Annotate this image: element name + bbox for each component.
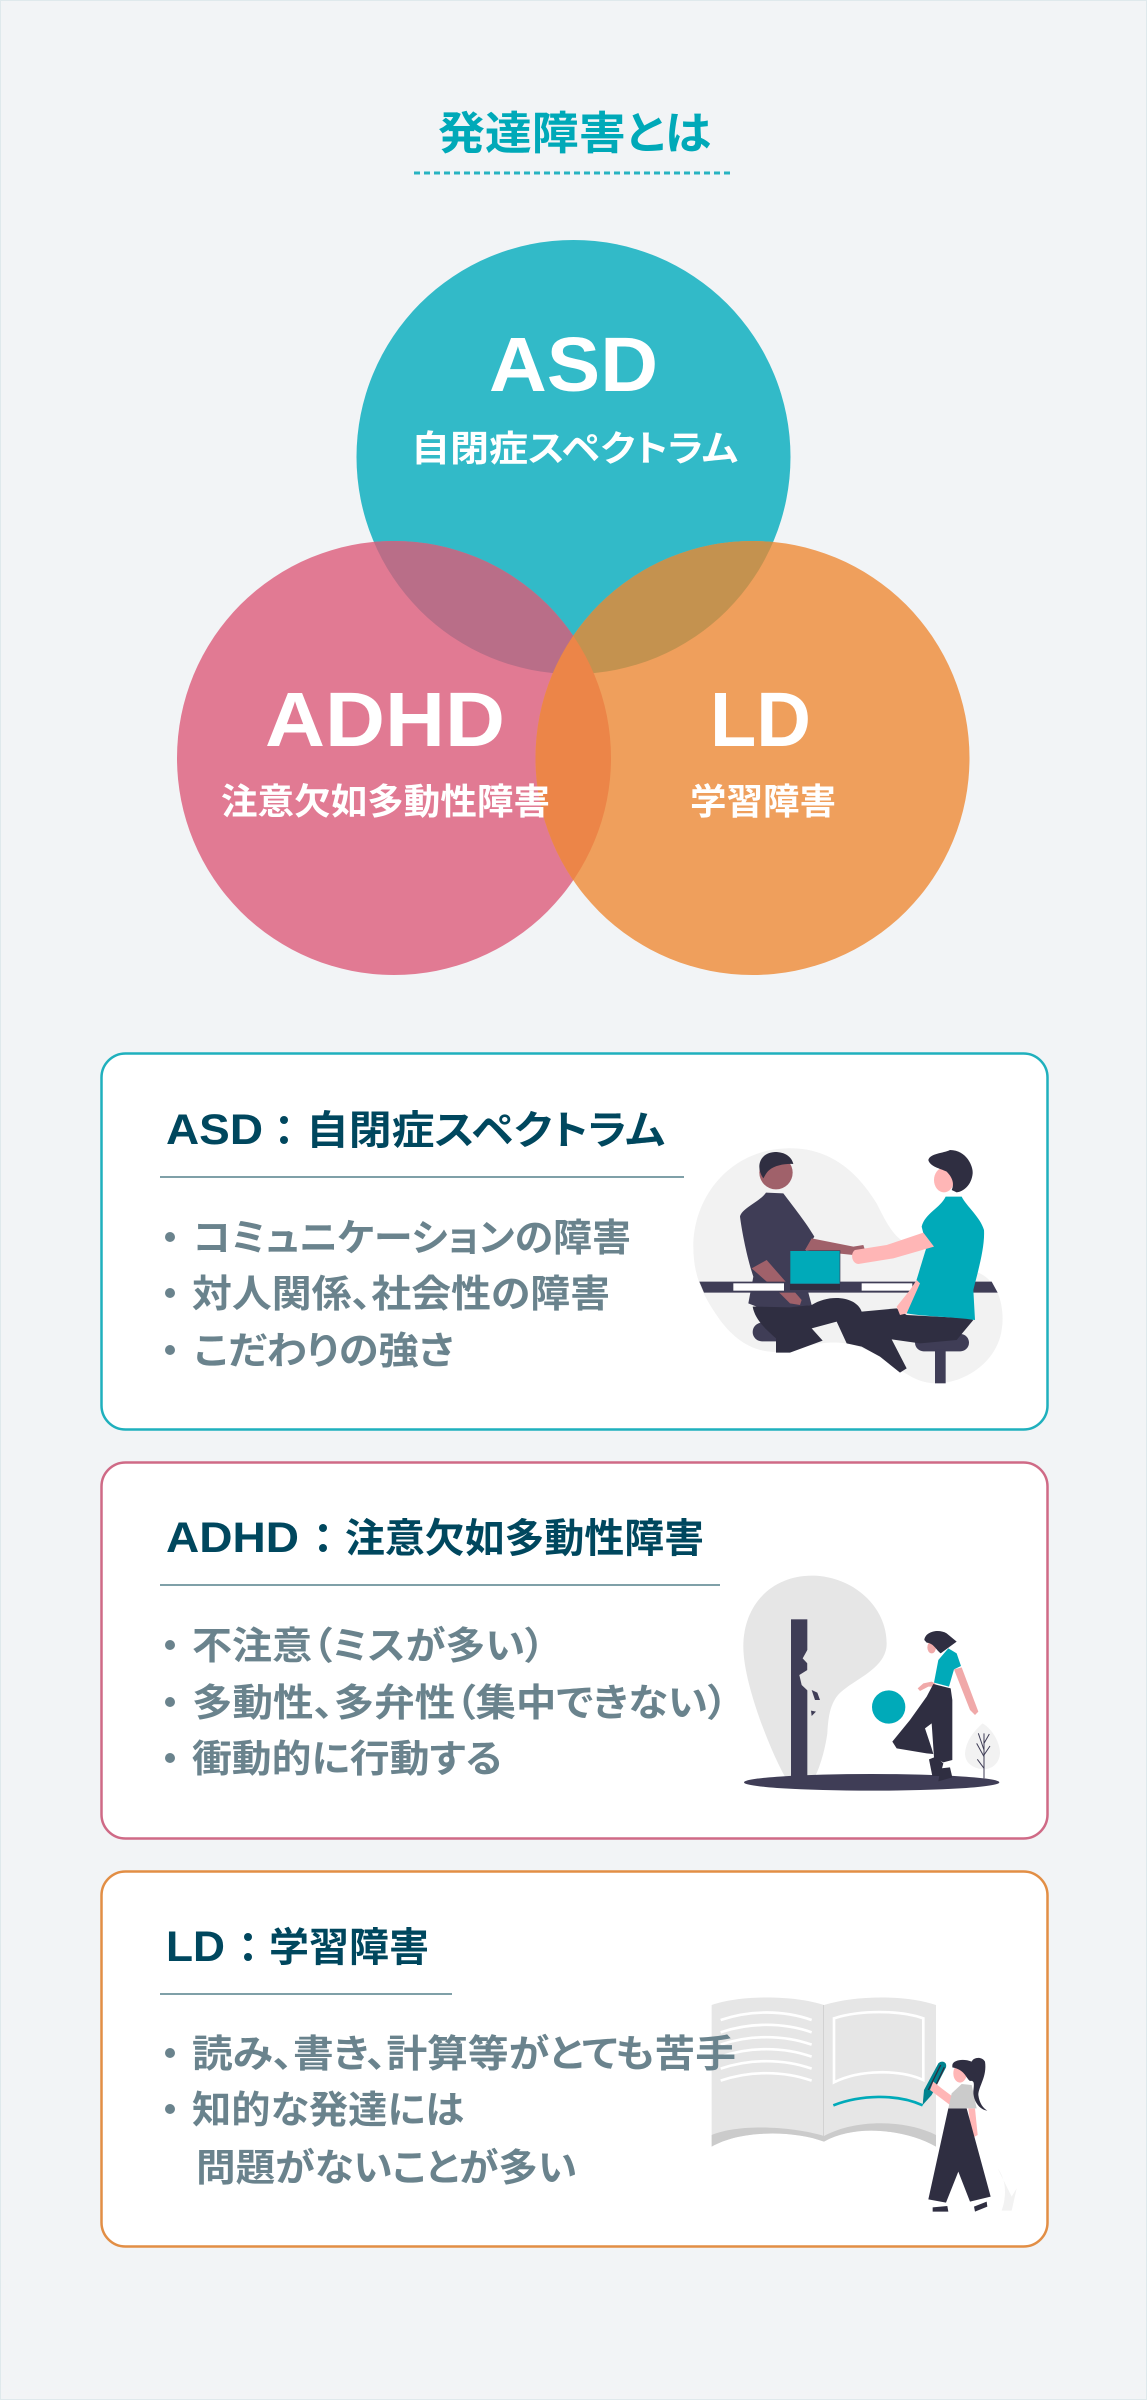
list: ASD traits: コミュニケーションの障害 — [193, 1218, 631, 1260]
heading: ADHD — [166, 1514, 704, 1562]
list: ADHD traits: 不注意（ミスが多い） — [192, 1626, 545, 1668]
overlap: ADHD and LD — [536, 636, 611, 880]
panel: ASD — [102, 1054, 1048, 1430]
list: ASD traits — [165, 1218, 631, 1373]
panel: LD — [102, 1872, 1048, 2246]
title: 発達障害とは — [438, 108, 711, 159]
heading: LD: LD — [166, 1923, 225, 1971]
panel: ADHD — [102, 1462, 1048, 1838]
list: LD traits: 問題がないことが多い — [196, 2148, 577, 2190]
label: ADHD: ADHD — [265, 677, 505, 763]
list: ASD traits: こだわりの強さ — [194, 1331, 454, 1373]
list: ASD traits: 対人関係、社会性の障害 — [192, 1274, 610, 1316]
illustration: book and woman — [712, 1997, 1017, 2212]
heading: LD: 学習障害 — [269, 1926, 429, 1970]
circle: ASD — [356, 240, 790, 674]
heading: ADHD: 注意欠如多動性障害 — [345, 1517, 704, 1561]
list: LD traits: 知的な発達には — [192, 2090, 464, 2132]
heading: ASD: 自閉症スペクトラム — [306, 1109, 665, 1153]
label: LD: LD — [710, 677, 811, 763]
list: ADHD traits: 衝動的に行動する — [192, 1739, 502, 1781]
list: LD traits: 読み、書き、計算等がとても苦手 — [192, 2034, 736, 2076]
circle: ADHD — [177, 541, 611, 975]
overlap: ASD and LD — [553, 541, 773, 673]
overlap: ASD and ADHD — [374, 541, 573, 673]
label: 学習障害: 学習障害 — [690, 781, 836, 822]
heading: ASD — [166, 1106, 665, 1154]
heading: ASD: ASD — [166, 1106, 263, 1154]
venn diagram — [177, 240, 970, 975]
illustration: handshake — [693, 1148, 1003, 1383]
heading: ADHD: ADHD — [166, 1514, 299, 1562]
list: ADHD traits: 多動性、多弁性（集中できない） — [192, 1683, 728, 1725]
list: ADHD traits — [165, 1626, 728, 1781]
circle: LD — [536, 541, 970, 975]
heading: LD — [166, 1923, 429, 1971]
label: ASD: ASD — [489, 322, 658, 408]
list: LD traits — [165, 2034, 736, 2190]
illustration: woman and ball — [743, 1576, 1000, 1791]
label: 注意欠如多動性障害: 注意欠如多動性障害 — [221, 781, 550, 822]
label: 自閉症スペクトラム: 自閉症スペクトラム — [411, 428, 738, 469]
